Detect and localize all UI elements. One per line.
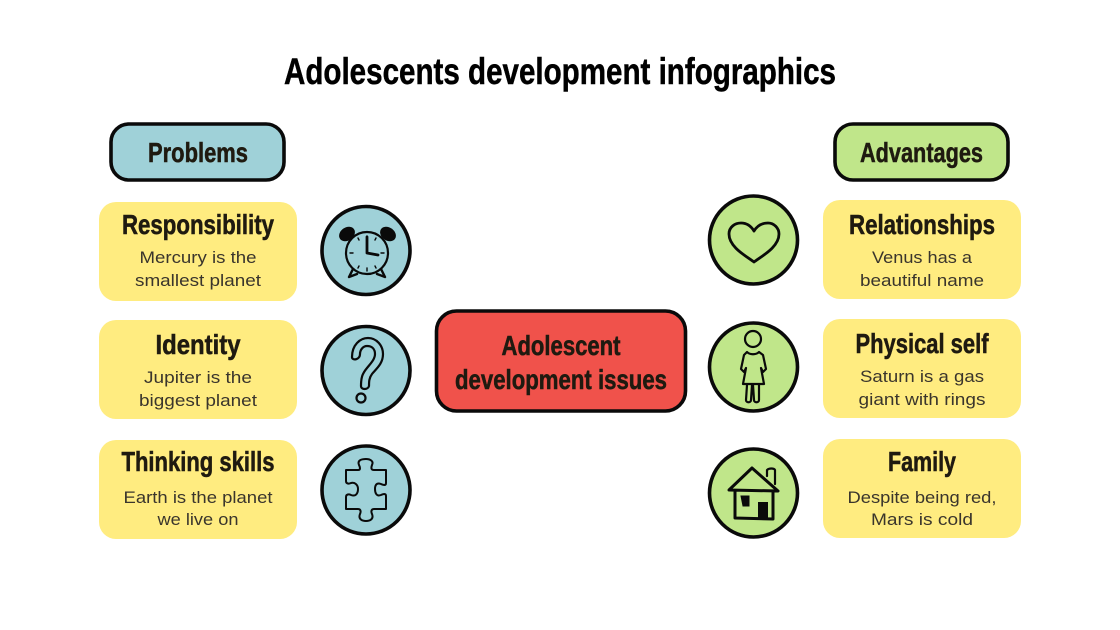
icon: heart xyxy=(710,196,798,284)
panel: Relationships: Venus has a xyxy=(872,248,973,267)
panel: Physical self: giant with rings xyxy=(858,390,986,409)
central box: Adolescent development issues xyxy=(436,311,686,411)
heading: Advantages xyxy=(835,124,1008,180)
panel: Thinking skills: we live on xyxy=(156,510,238,529)
icon: alarm clock xyxy=(322,206,410,294)
central box: Adolescent development issues: Adolescent xyxy=(502,330,620,361)
panel: Identity xyxy=(99,320,297,419)
panel: Identity: biggest planet xyxy=(139,391,257,410)
icon: puzzle piece xyxy=(322,446,410,534)
icon: question mark xyxy=(322,326,410,414)
panel: Responsibility xyxy=(99,202,297,301)
panel: Responsibility: Responsibility xyxy=(122,209,274,240)
panel: Relationships xyxy=(823,200,1021,299)
panel: Family: Despite being red, xyxy=(848,488,996,507)
panel: Family: Mars is cold xyxy=(871,510,973,529)
heading: Problems: Problems xyxy=(148,137,248,168)
panel: Physical self xyxy=(823,319,1021,418)
panel: Physical self: Saturn is a gas xyxy=(860,367,984,386)
panel: Thinking skills xyxy=(99,440,297,539)
panel: Responsibility: smallest planet xyxy=(135,271,261,290)
panel: Responsibility: Mercury is the xyxy=(140,248,256,267)
icon: house xyxy=(710,449,798,537)
panel: Thinking skills: Thinking skills xyxy=(122,446,274,477)
panel: Relationships: Relationships xyxy=(849,209,995,240)
title: Adolescents development infographics xyxy=(284,51,836,92)
panel: Thinking skills: Earth is the planet xyxy=(124,488,273,507)
panel: Identity: Jupiter is the xyxy=(144,368,252,387)
icon: person in dress xyxy=(710,323,798,411)
panel: Family xyxy=(823,439,1021,538)
panel: Relationships: beautiful name xyxy=(860,271,984,290)
central box: Adolescent development issues: development issues xyxy=(455,364,667,395)
panel: Physical self: Physical self xyxy=(856,328,989,359)
panel: Identity: Identity xyxy=(156,329,241,360)
heading: Problems xyxy=(111,124,284,180)
heading: Advantages: Advantages xyxy=(860,137,983,168)
panel: Family: Family xyxy=(888,446,956,477)
